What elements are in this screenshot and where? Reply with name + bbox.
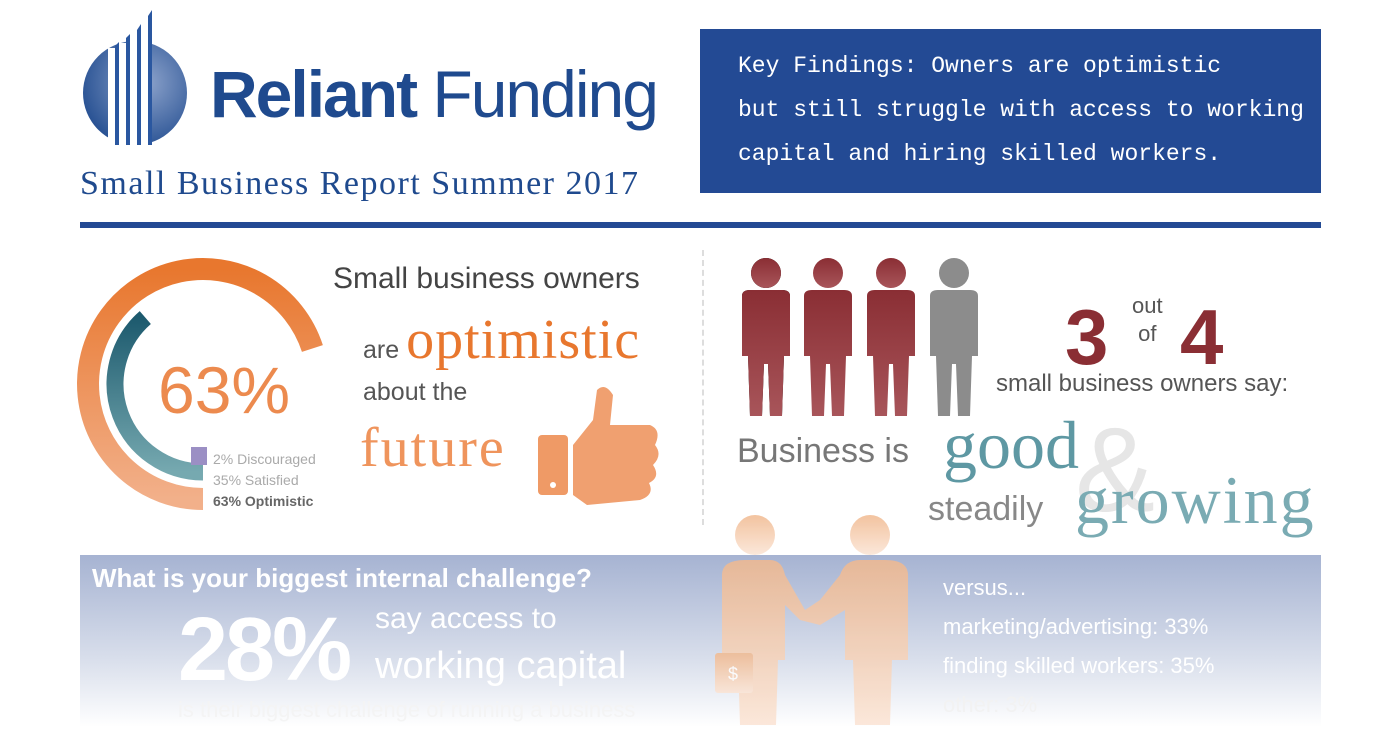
icon: thumbs up bbox=[538, 387, 658, 505]
logo wordmark: Reliant Funding bbox=[210, 57, 657, 131]
text: of bbox=[1138, 321, 1156, 346]
text: say access to bbox=[375, 602, 557, 635]
versus list: finding skilled workers: 35% bbox=[943, 653, 1214, 678]
icon: handshake: $ bbox=[728, 664, 738, 684]
icon: four people bbox=[742, 258, 978, 416]
gauge legend: 63% Optimistic bbox=[213, 493, 313, 509]
panel: internal challenge bbox=[80, 555, 1321, 727]
text: small business owners say: bbox=[996, 370, 1288, 397]
key findings box: capital and hiring skilled workers. bbox=[738, 141, 1221, 167]
subtitle: Small Business Report Summer 2017 bbox=[80, 165, 640, 202]
versus list: versus... bbox=[943, 575, 1026, 600]
versus list: other: 3% bbox=[943, 692, 1037, 717]
versus list bbox=[943, 575, 1214, 717]
gauge legend: 2% Discouraged bbox=[213, 451, 316, 467]
28% stat: 28% bbox=[178, 600, 349, 700]
challenge heading: What is your biggest internal challenge? bbox=[92, 563, 592, 593]
63%: 63% bbox=[158, 353, 290, 427]
text: steadily bbox=[928, 490, 1043, 528]
text: Business is bbox=[737, 432, 909, 470]
business is good & growing: & bbox=[1075, 403, 1155, 537]
text: are optimistic bbox=[363, 309, 640, 371]
optimistic text: Small business owners bbox=[333, 262, 640, 295]
text: future bbox=[360, 417, 506, 479]
key findings box bbox=[700, 29, 1321, 193]
gauge legend: 35% Satisfied bbox=[213, 472, 299, 488]
text: out bbox=[1132, 293, 1163, 318]
gauge chart bbox=[77, 258, 323, 510]
key findings box: Key Findings: Owners are optimistic bbox=[738, 53, 1221, 79]
logo icon bbox=[83, 10, 187, 145]
text: good bbox=[943, 407, 1079, 483]
text: is their biggest challenge of running a business bbox=[178, 697, 635, 722]
text: about the bbox=[363, 378, 467, 406]
versus list: marketing/advertising: 33% bbox=[943, 614, 1208, 639]
3 out of 4: 3 bbox=[1065, 293, 1108, 381]
gauge legend bbox=[213, 451, 316, 509]
key findings box: but still struggle with access to working bbox=[738, 97, 1304, 123]
icon: handshake bbox=[715, 515, 908, 725]
text: working capital bbox=[375, 645, 626, 687]
text: growing bbox=[1075, 462, 1316, 538]
text: 4 bbox=[1180, 293, 1223, 381]
